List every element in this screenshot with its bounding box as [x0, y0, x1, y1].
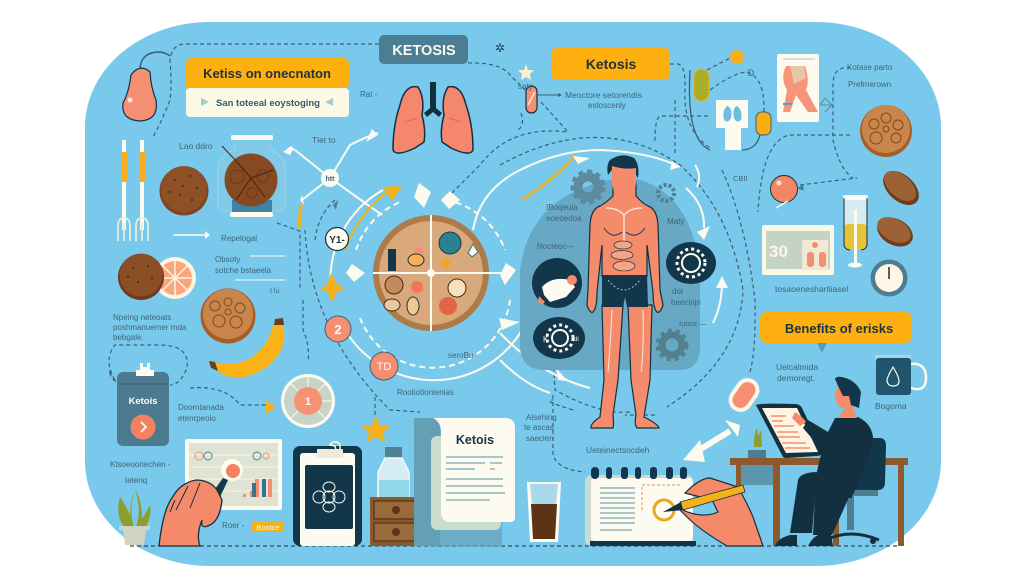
diagram: white arcs around the pizza: htt: [326, 176, 335, 183]
text labels: Nocteoc—: [537, 242, 574, 251]
icon: white pedestal: [716, 100, 748, 150]
header: yellow and cream box: Ketiss on onecnaton: [203, 66, 331, 81]
arrow: yellow pointer: [266, 400, 276, 414]
label: number circle Y1: Y1-: [329, 235, 345, 246]
icon: dark circle with pig: [532, 258, 582, 308]
stat card 30: [762, 225, 834, 275]
picture card: leg illustration: [777, 54, 832, 122]
text labels: [110, 63, 907, 532]
icon: brown oval upper: [877, 164, 925, 212]
text labels: Ueteinectsocdeh: [586, 445, 650, 455]
text labels: Roer -: [222, 521, 245, 530]
document: Ketosis: [414, 418, 515, 546]
text labels: Lao ddro: [179, 141, 213, 151]
progress dial 1: [281, 374, 335, 428]
icon: mug: [875, 355, 926, 395]
text labels: CBII: [733, 174, 748, 183]
text labels: Tlet to: [312, 135, 336, 145]
icon: water bottle: [378, 447, 409, 498]
icon: coral pill: [724, 373, 764, 417]
text labels: IBoqeula: [546, 203, 578, 212]
header: yellow and cream box: San toteeal eoystoging: [216, 98, 320, 109]
icon: brown oval lower: [872, 212, 918, 252]
text labels: eoeoedoa: [546, 214, 582, 223]
icon: yellow capsule: [756, 112, 771, 135]
text labels: tosaoeneshartiiasel: [775, 284, 848, 294]
icon: yellow star: [362, 416, 390, 442]
label: number circle 2: [325, 316, 351, 342]
text labels: estoscenly: [588, 101, 626, 110]
text labels: Meoctore setorendis: [565, 90, 642, 100]
text labels: Uelcalmida: [776, 362, 818, 372]
text labels: I lu: [270, 288, 279, 295]
icon: yellow star diamond: [320, 273, 345, 302]
text labels: demoregt.: [777, 373, 815, 383]
text labels: Maty: [667, 217, 684, 226]
stat card 30: 30: [769, 242, 788, 261]
text labels: saty: [518, 82, 533, 91]
notebook: [585, 467, 696, 546]
text labels: Repelogal: [221, 234, 257, 243]
hand with yellow pen (right): [663, 478, 763, 546]
text labels: saecien: [526, 434, 554, 443]
text labels: Rat -: [360, 90, 378, 99]
icon: patterned cookie: [200, 288, 256, 344]
icon: dark circle KO gear: [533, 317, 585, 359]
label: number circle TD: [370, 352, 398, 380]
connector lines: [109, 44, 900, 546]
panel: human body: [520, 155, 700, 428]
heading: Benefits of erisks: [760, 312, 912, 353]
diagram: white arcs around the pizza: [283, 129, 728, 393]
document: Ketosis: Ketois: [456, 433, 494, 447]
text labels: Kotase parto: [847, 63, 893, 72]
icon: cookie and orange slice: [118, 254, 196, 300]
heading: KETOSIS tag: [379, 35, 468, 64]
icon: lungs: [393, 82, 473, 153]
icon: forks: [118, 140, 148, 241]
background panel: [85, 22, 941, 566]
icon: star: [518, 64, 534, 80]
heading: KETOSIS tag: KETOSIS: [392, 43, 456, 59]
icon: patterned cookie right: [860, 105, 912, 157]
text labels: beecinjn: [671, 298, 701, 307]
icon: olive capsule and dot: D: [748, 68, 755, 78]
icon: brown cookie: [160, 166, 208, 216]
icon: dark circle KO gear: dl: [574, 337, 579, 343]
text labels: seroBu: [448, 351, 473, 360]
tablet device: [293, 442, 362, 546]
icon: banana: [209, 318, 285, 378]
icon: drawer cabinet: [370, 497, 421, 546]
icon: pear-shaped organ: [123, 52, 170, 121]
icon: clock: [870, 260, 908, 296]
text labels: Rootiotionienias: [397, 388, 454, 397]
icon: coral ball: [770, 176, 803, 208]
header: yellow and cream box: [186, 58, 349, 117]
text labels: Bogoma: [875, 401, 907, 411]
text labels: Npeing neteoats: [113, 313, 171, 322]
heading: Ketosis yellow: Ketosis: [586, 56, 636, 72]
text labels: Iutsst —: [679, 319, 707, 328]
icon: olive capsule and dot: [694, 50, 755, 101]
text labels: sotche bstaeela: [215, 266, 272, 275]
text labels: dot: [672, 287, 684, 296]
text labels: Alsehing: [526, 413, 557, 422]
text labels: Obsoty: [215, 255, 240, 264]
icon: sparkle: ✲: [495, 41, 505, 55]
text labels: Prefmerown: [848, 80, 891, 89]
text labels: Ktsoeoonechen -: [110, 460, 171, 469]
text labels: etenrpeolo: [178, 414, 216, 423]
text labels: tetenq: [125, 476, 147, 485]
text labels: Doomtanada: [178, 403, 224, 412]
chart card: [185, 439, 282, 510]
badge: Ketosis clipboard: Ketois: [128, 396, 158, 407]
icon: potted plant: [118, 490, 150, 545]
icon: dark circle with gear: [666, 242, 716, 284]
icon: dark circle KO gear: K: [543, 335, 549, 344]
heading: Benefits of erisks: Benefits of erisks: [785, 321, 893, 336]
progress dial 1: 1: [305, 396, 311, 408]
icon: hand with pen (left): [159, 478, 228, 546]
heading: Ketosis yellow: [551, 48, 670, 80]
arrow: white double arrow: [683, 420, 740, 462]
icon: test tube: [843, 195, 868, 268]
icon: gear: [658, 330, 686, 360]
badge: Ketosis clipboard: [117, 363, 169, 446]
text labels: te ascas: [524, 423, 554, 432]
person at desk: [730, 377, 908, 546]
icon: coral capsule: [526, 86, 562, 113]
icon: cookie in jar: [218, 135, 285, 217]
label: number circle 2: 2: [334, 322, 342, 337]
text labels: poshmanuemer mda: [113, 323, 187, 332]
label: number circle Y1: [326, 228, 348, 250]
text labels: bebgale.: [113, 333, 144, 342]
text labels: Bostce: [257, 523, 279, 532]
pizza diagram: [373, 215, 505, 331]
icon: glass of cola: [527, 482, 561, 542]
label: number circle TD: TD: [377, 361, 391, 373]
